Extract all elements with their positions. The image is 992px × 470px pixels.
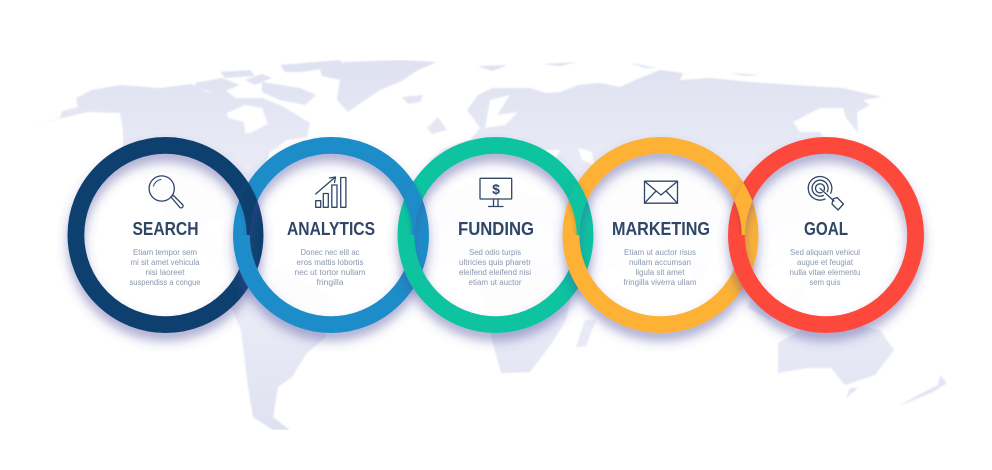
- body text: fringilla viverra ullam: [624, 278, 697, 287]
- map: arctic islands: [195, 60, 760, 105]
- map: south america: [228, 262, 330, 430]
- icon: envelope: [644, 181, 678, 203]
- translucent discs: [76, 145, 916, 325]
- icon: monitor with dollar: $: [492, 181, 500, 197]
- body text: Etiam ut auctor risus: [624, 248, 696, 257]
- map: eurasia: [428, 70, 882, 300]
- body text: mi sit amet vehicula: [130, 258, 200, 267]
- ring: analytics: [241, 145, 421, 325]
- icon: bar chart with arrow: [316, 177, 346, 207]
- world map: [26, 60, 947, 430]
- map: australia: [778, 322, 894, 385]
- overlap: analytics over funding: [403, 181, 423, 235]
- ring: funding: [406, 145, 585, 325]
- body text: ultricies quis pharetr: [459, 258, 531, 267]
- heading: SEARCH: [132, 219, 198, 239]
- panel: goal: [790, 177, 860, 287]
- body text: nisi laoreet: [146, 268, 185, 277]
- heading: GOAL: [804, 219, 848, 239]
- overlap: marketing over goal: [732, 182, 754, 235]
- ring interlace overlaps: [238, 181, 754, 235]
- icon: target with arrow: [808, 177, 844, 210]
- map: greenland: [320, 60, 437, 112]
- body text: Sed aliquam vehicul: [790, 248, 860, 257]
- body text: nec ut tortor nullam: [294, 268, 366, 277]
- map: madagascar: [576, 320, 596, 347]
- body text: eleifend eleifend nisi: [459, 268, 531, 277]
- ring: search: [76, 145, 255, 325]
- panel: search: [130, 176, 201, 287]
- body text: ligula sit amet: [636, 268, 685, 277]
- heading: MARKETING: [612, 219, 710, 239]
- body text: Etiam tempor sem: [133, 248, 197, 257]
- panel: analytics: [287, 177, 375, 287]
- icon: magnifier: [149, 176, 183, 208]
- heading: FUNDING: [458, 219, 534, 239]
- body text: nullam accumsan: [629, 258, 691, 267]
- body text: suspendiss a congue: [130, 278, 201, 287]
- body text: [790, 248, 860, 287]
- map: indonesia: [748, 285, 865, 328]
- body text: augue et feugiat: [797, 258, 854, 267]
- overlap: funding over marketing: [568, 181, 588, 235]
- body text: [459, 248, 531, 287]
- panel: funding: [458, 178, 534, 287]
- coloured rings: [76, 145, 916, 325]
- body text: fringilla: [316, 278, 344, 287]
- map: seas: [227, 95, 594, 165]
- ring: goal: [736, 145, 916, 325]
- map: new zealand: [897, 375, 947, 407]
- map: africa: [418, 183, 598, 373]
- body text: nulla vitae elementu: [790, 268, 860, 277]
- map: tasmania: [846, 388, 858, 398]
- panel: marketing: [612, 181, 710, 287]
- body text: Donec nec elit ac: [300, 248, 360, 257]
- body text: [294, 248, 366, 287]
- map: iceland and britain: [402, 95, 447, 134]
- body text: Sed odio turpis: [469, 248, 521, 257]
- overlap: search over analytics: [238, 182, 258, 235]
- map: north and central america: [26, 84, 310, 275]
- body text: [624, 248, 697, 287]
- body text: [130, 248, 201, 287]
- body text: eros mattis lobortis: [296, 258, 364, 267]
- heading: ANALYTICS: [287, 219, 375, 239]
- body text: etiam ut auctor: [468, 278, 522, 287]
- body text: sem quis: [810, 278, 840, 287]
- ring: marketing: [571, 145, 750, 325]
